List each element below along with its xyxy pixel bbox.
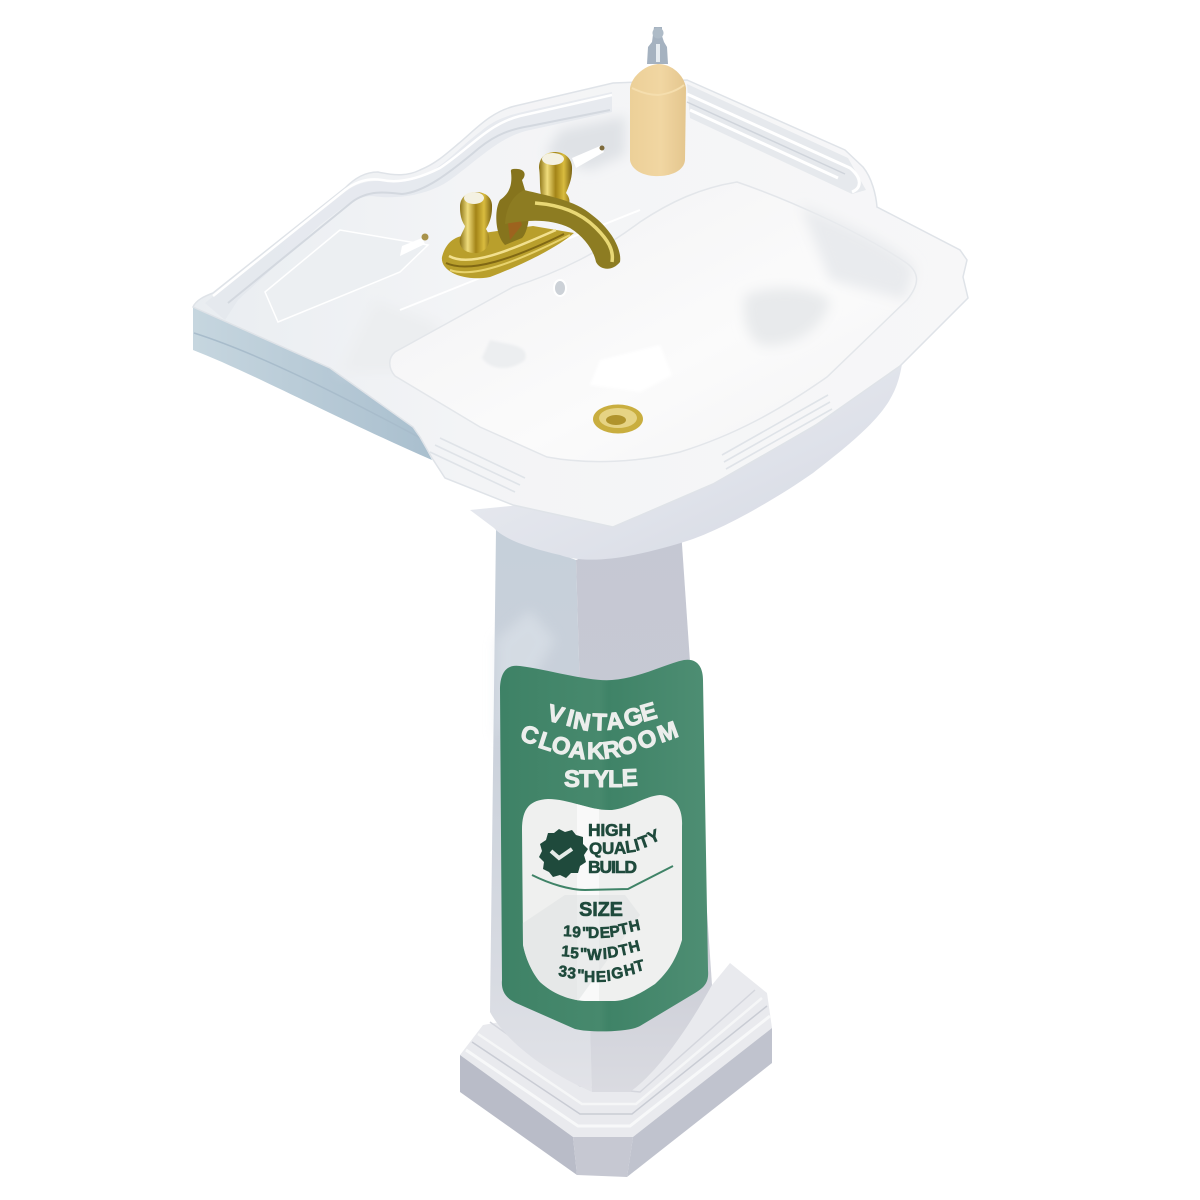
soap dispenser: [630, 27, 686, 176]
label: size specification: 15"WIDTH: [561, 938, 642, 964]
label: size specification: 19"DEPTH: [563, 917, 642, 942]
basin top rim: [193, 80, 968, 527]
label: high quality build: HIGH: [588, 820, 631, 840]
label: high quality build: QUALITY: [589, 825, 664, 858]
label: heading: VINTAGE: [544, 697, 660, 737]
basin left side face: [193, 307, 432, 460]
bottle: [630, 64, 686, 176]
product illustration: pedestal sink with label: [192, 27, 969, 1177]
faucet: [442, 152, 620, 278]
spout: [505, 190, 620, 269]
pedestal column: [490, 515, 712, 1092]
label: heading: STYLE: [564, 764, 638, 793]
soap dish recess: [265, 230, 428, 322]
left handle: [460, 192, 492, 253]
centre lift rod and body: [496, 169, 529, 245]
pump: [647, 27, 668, 64]
label: panel reflections: [520, 795, 640, 1005]
basin rim ribs: [430, 395, 832, 492]
label: size specification: SIZE: [579, 899, 623, 921]
label: white inner panel: [522, 795, 682, 1001]
label: size specification: [558, 899, 647, 986]
pedestal base: [460, 963, 772, 1177]
basin bowl: [390, 182, 917, 462]
label: heading: [517, 697, 682, 793]
basin underside: [470, 355, 902, 560]
icon: quality badge with check: [539, 829, 588, 878]
label: green panel: [500, 660, 708, 1031]
label: high quality build: [588, 820, 664, 877]
divider: [532, 866, 673, 890]
small fitting pins: [400, 146, 604, 256]
drain: [593, 404, 643, 434]
overflow hole: [554, 280, 566, 296]
right handle: [539, 152, 572, 212]
faucet base plate: [442, 226, 574, 278]
label: heading: CLOAKROOM: [517, 716, 682, 765]
rim moulding band: [205, 92, 612, 320]
label: size specification: 33"HEIGHT: [558, 957, 647, 986]
label: high quality build: BUILD: [588, 857, 637, 877]
